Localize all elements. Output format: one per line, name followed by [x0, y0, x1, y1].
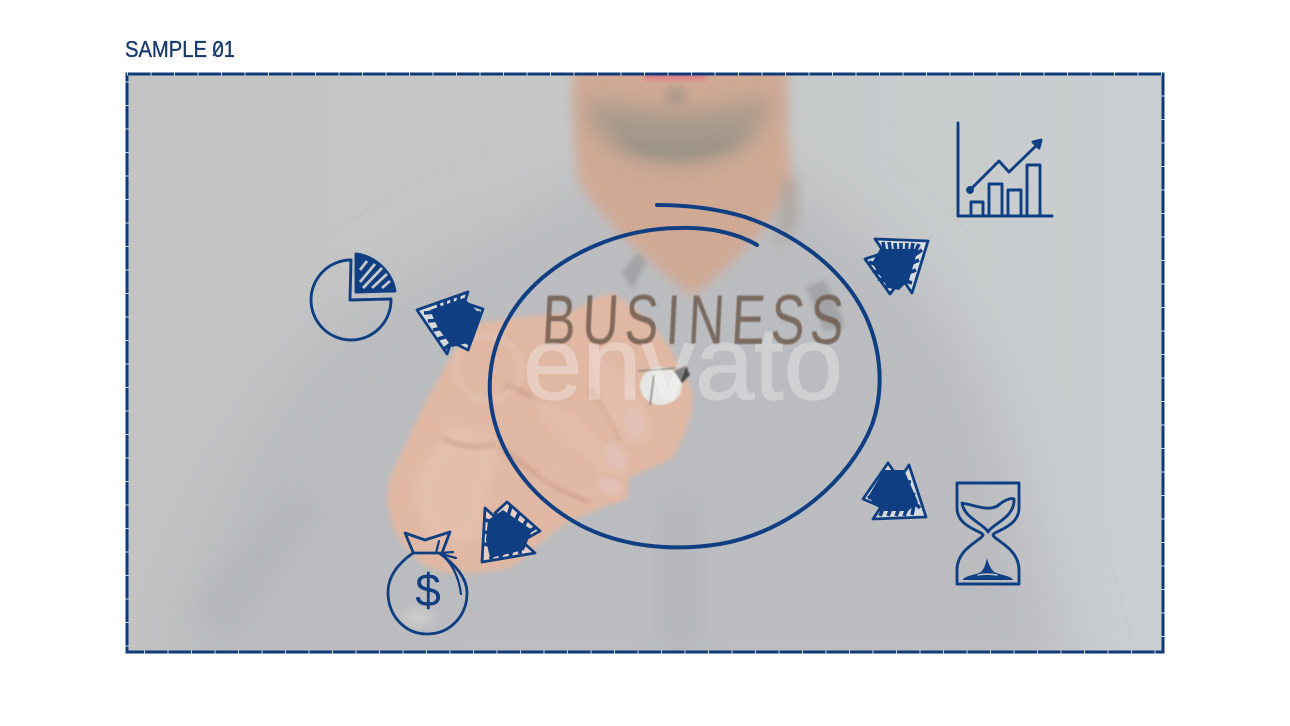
hand and fingers	[387, 293, 693, 573]
bag highlight	[404, 611, 432, 625]
panel: video still of presenter writing on glass	[127, 60, 1163, 680]
watermark: envato	[523, 306, 843, 422]
presenter's shirt	[210, 195, 1062, 650]
presenter's face and neck	[572, 60, 792, 296]
chin shadow	[624, 139, 739, 158]
collar shadows	[622, 252, 845, 332]
title: SAMPLE 01	[125, 36, 235, 62]
collar shadow	[776, 178, 798, 250]
circle drawn around the word	[490, 205, 880, 547]
marker pen	[638, 366, 690, 405]
arrow: to pie chart	[417, 292, 483, 354]
ring finger	[542, 474, 628, 504]
icon: hourglass	[957, 483, 1019, 584]
arrow: to money bag	[482, 502, 540, 562]
icon: money bag: $	[415, 564, 441, 616]
arrow: to hourglass	[863, 463, 926, 519]
icon: pie chart	[311, 254, 395, 340]
beard	[585, 96, 770, 165]
icon: money bag	[388, 532, 467, 634]
soul patch	[666, 88, 686, 104]
finger creases	[442, 385, 620, 502]
arrow: to line chart	[865, 239, 928, 294]
index finger	[600, 396, 626, 438]
handwritten word: BUSINESS	[540, 281, 846, 359]
lips	[642, 76, 708, 82]
panel frame	[127, 74, 1163, 652]
shirt folds	[190, 490, 695, 660]
middle finger	[532, 396, 614, 476]
icon: line and bar chart	[958, 123, 1052, 216]
watermark	[527, 332, 839, 400]
fingernails	[598, 408, 643, 495]
